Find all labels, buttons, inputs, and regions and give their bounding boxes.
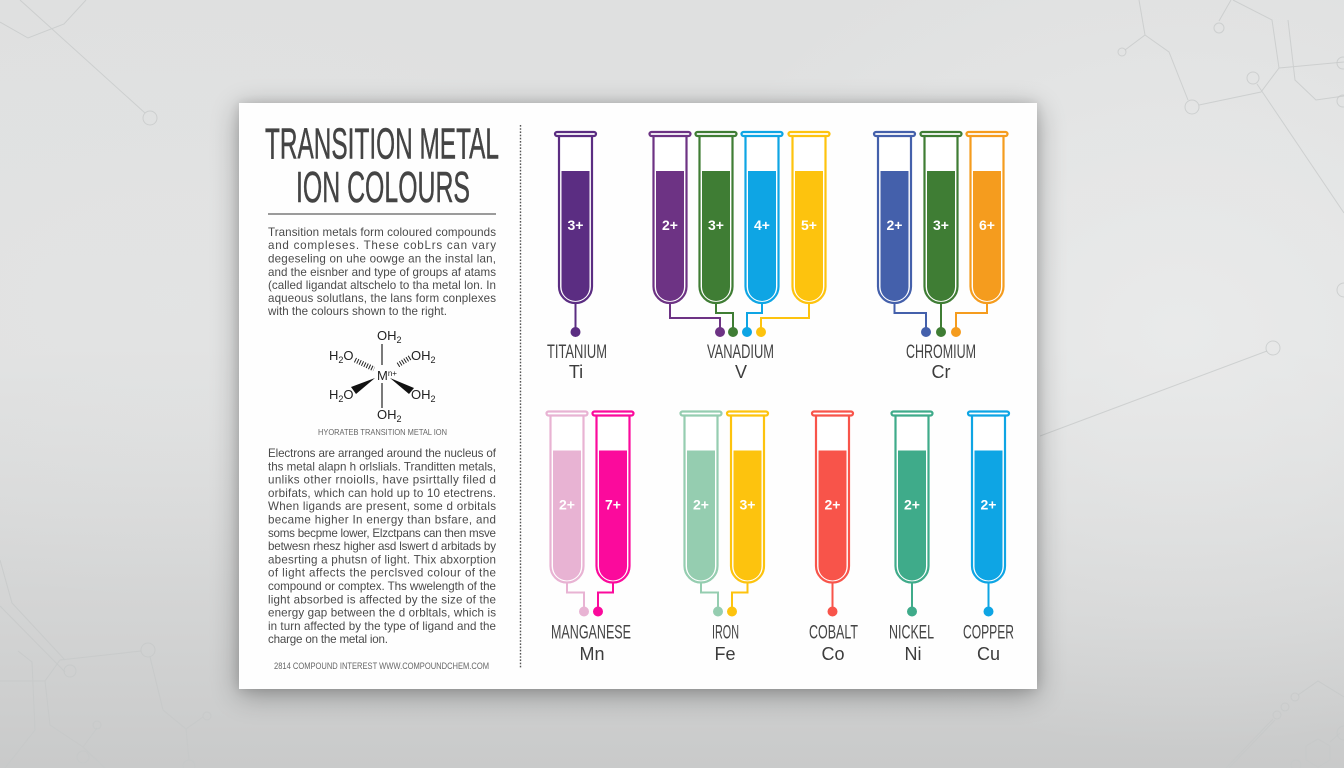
chart: hydrated ion structure: OH — [377, 328, 396, 343]
title: ION COLOURS — [296, 163, 470, 212]
panel: copper — [963, 412, 1014, 664]
text block: explanation: orbifats, which can hold up to 10 etectrens. — [268, 487, 496, 500]
text block: introduction: (called ligandat altschelo to tha metal lon. In — [268, 279, 496, 292]
panel: nickel — [889, 412, 934, 664]
tube: Cr 6+: 6+ — [979, 217, 995, 233]
tube: Cr 2+ — [874, 132, 931, 337]
text block: explanation: abesrting a phutsn of light. Thix abxorption — [268, 553, 496, 566]
text block: explanation — [268, 447, 497, 646]
caption: HYORATEB TRANSITION METAL ION — [318, 427, 447, 437]
tube: Cr 3+: 3+ — [933, 217, 949, 233]
tube: Ti 3+: 3+ — [568, 217, 583, 233]
text block: explanation: light absorbed is affected by the size of the — [268, 593, 496, 606]
panel: chromium: CHROMIUM — [906, 341, 976, 363]
text block: explanation: ths metal alapn h orlslials. Tranditten metals, — [268, 460, 496, 473]
chart: hydrated ion structure: 2 — [430, 355, 436, 365]
panel: vanadium: VANADIUM — [707, 341, 774, 363]
panel: chromium — [874, 132, 1008, 382]
panel: titanium — [547, 132, 607, 382]
text block: introduction: aqueous solutlans, the lans form conplexes — [268, 292, 496, 305]
tube: Ni 2+: 2+ — [904, 496, 920, 512]
tube: V 5+: 5+ — [801, 217, 817, 233]
tube: V 4+ — [742, 132, 782, 337]
tube: Co 2+: 2+ — [825, 496, 840, 512]
title — [265, 120, 499, 212]
tube: Cr 3+ — [920, 132, 962, 337]
panel: manganese: MANGANESE — [551, 622, 631, 644]
text block: explanation: Electrons are arranged around the nucleus of — [268, 447, 497, 460]
text block: explanation: energy gap between the d orbltals, which is — [268, 607, 496, 620]
chart: hydrated ion structure: 2 — [338, 355, 343, 365]
tube: Mn 2+ — [546, 412, 589, 616]
chart: hydrated ion structure — [318, 328, 447, 437]
chart: hydrated ion structure: n+ — [388, 369, 397, 378]
panel: chromium: Cr — [932, 362, 950, 382]
panel: iron: IRON — [712, 622, 739, 644]
tube: Cu 2+ — [968, 412, 1009, 616]
chart: hydrated ion structure: O — [343, 387, 354, 402]
text block: explanation: soms becpme lower, Elzctpans can then msve — [268, 527, 496, 540]
chart: hydrated ion structure: O — [343, 348, 354, 363]
text block: explanation: unliks other rnoiolls, have psirttally filed d — [268, 474, 496, 487]
tube: V 5+ — [756, 132, 830, 337]
panel: cobalt — [809, 412, 858, 664]
panel: iron — [680, 412, 768, 664]
tube: V 3+ — [696, 132, 738, 337]
panel: nickel: Ni — [904, 644, 922, 664]
chart: hydrated ion structure: 2 — [338, 394, 343, 404]
panel: manganese — [546, 412, 634, 664]
tube: Mn 7+: 7+ — [605, 496, 621, 512]
tube: Fe 2+ — [680, 412, 723, 616]
panel: vanadium: V — [735, 362, 747, 382]
panel: titanium: TITANIUM — [547, 341, 607, 363]
chart: hydrated ion structure: H — [329, 387, 338, 402]
tube: Ni 2+ — [892, 412, 932, 616]
text block: explanation: became higher In energy than bsfare, and — [268, 514, 496, 526]
panel: white card — [239, 103, 1037, 689]
text block: introduction — [267, 226, 496, 318]
panel: cobalt: Co — [821, 644, 845, 664]
tube: Cr 6+ — [951, 132, 1008, 337]
tube: Fe 2+: 2+ — [693, 496, 709, 512]
tube: Co 2+ — [812, 412, 853, 616]
chart: hydrated ion structure: 2 — [430, 394, 436, 404]
chart: hydrated ion structure: 2 — [396, 414, 402, 424]
title: TRANSITION METAL — [265, 120, 499, 168]
tube: Mn 7+ — [592, 412, 634, 616]
tube: V 2+: 2+ — [662, 217, 678, 233]
tube: Cu 2+: 2+ — [981, 496, 996, 512]
text block: introduction: and compleses. These cobLrs can vary — [268, 239, 496, 252]
panel: iron: Fe — [714, 644, 736, 664]
panel: vanadium — [650, 132, 830, 382]
tube: V 2+ — [650, 132, 725, 337]
chart: hydrated ion structure: OH — [411, 387, 430, 402]
tube: Fe 3+ — [727, 412, 768, 616]
tube: V 4+: 4+ — [754, 217, 770, 233]
chart: hydrated ion structure: OH — [377, 407, 396, 422]
panel: left text column — [265, 120, 499, 671]
text block: introduction: and the eisnber and type of groups af atams — [268, 266, 496, 279]
text block: explanation: betwesn rhesz higher asd lswert d arbitads by — [268, 540, 496, 553]
tube: Mn 2+: 2+ — [559, 496, 575, 512]
tube: V 3+: 3+ — [708, 217, 724, 233]
panel: copper: COPPER — [963, 622, 1014, 644]
chart: hydrated ion structure: 2 — [396, 335, 402, 345]
chart: hydrated ion structure: OH — [411, 348, 430, 363]
panel: titanium: Ti — [569, 362, 583, 382]
panel: cobalt: COBALT — [809, 622, 858, 644]
text block: explanation: of light affects the perclsved colour of the — [268, 567, 496, 580]
panel: nickel: NICKEL — [889, 622, 934, 644]
panel: copper: Cu — [977, 644, 1000, 664]
text block: explanation: When ligands are present, some d orbitals — [268, 500, 496, 513]
tube: Cr 2+: 2+ — [887, 217, 902, 233]
text block: explanation: charge on the metal ion. — [268, 633, 388, 646]
text block: introduction: degeseling on uhe oowge an the instal lan, — [268, 252, 496, 266]
chart: hydrated ion structure: M — [377, 368, 388, 383]
panel: manganese: Mn — [579, 644, 605, 664]
tube: Ti 3+ — [555, 132, 596, 337]
chart: hydrated ion structure: H — [329, 348, 338, 363]
text block: introduction: Transition metals form coloured compounds — [268, 226, 496, 239]
text block: explanation: in turn affected by the type of ligand and the — [268, 620, 496, 633]
text block: introduction: with the colours shown to the right. — [267, 305, 447, 318]
text block: explanation: compound or comptex. Ths wwelength of the — [268, 580, 496, 593]
tube: Fe 3+: 3+ — [740, 496, 755, 512]
footer credit: 2814 COMPOUND INTEREST WWW.COMPOUNDCHEM.COM — [274, 660, 489, 671]
